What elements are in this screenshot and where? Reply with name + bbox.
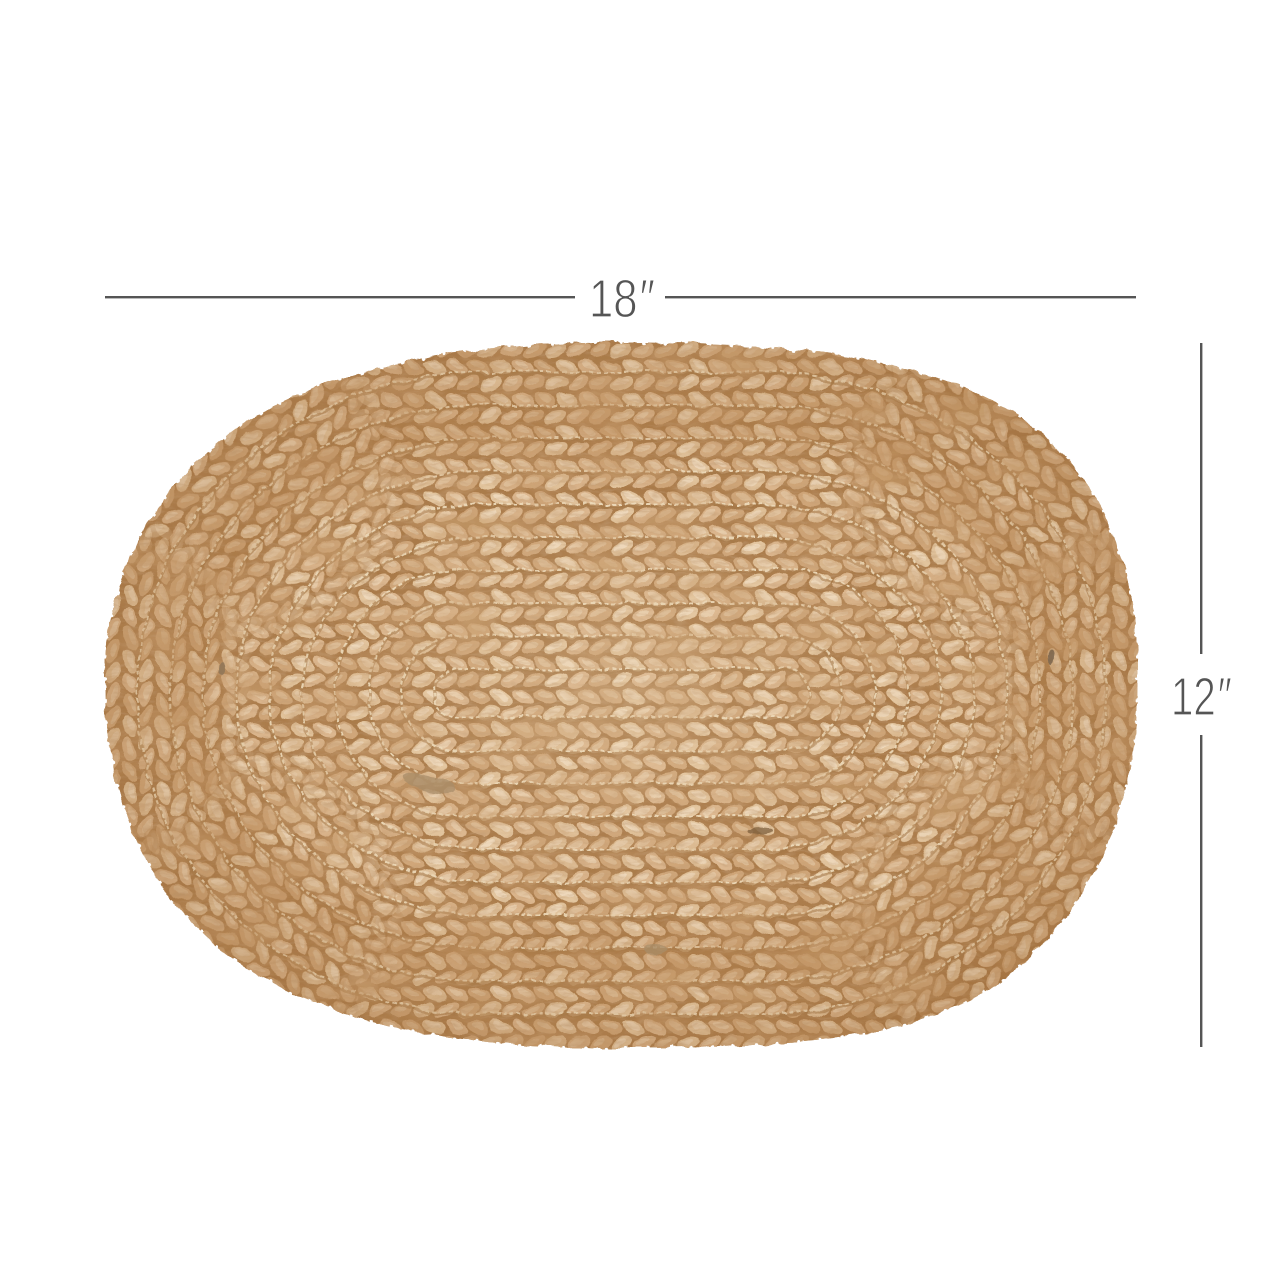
infographic: placemat with dimensions: [104, 280, 1230, 1050]
worn fibre patches: [219, 651, 1053, 955]
braid lobes: diagonal corners, top right and bottom left: [128, 365, 1118, 1018]
tonal mottling: [100, 335, 1145, 1055]
stitch thread lines between rings: [137, 372, 1106, 1014]
overall edge shading: [100, 335, 1145, 1055]
dimension: height 12 inches: 12″: [1171, 667, 1231, 727]
braid lobes: diagonal corners, top left and bottom right: [136, 375, 1118, 1026]
braid lobes: long straight runs: [100, 335, 1145, 1055]
darker ring band: [190, 425, 1050, 955]
braided jute placemat: [100, 335, 1145, 1055]
stitch shadow lines between rings: [137, 374, 1106, 1016]
dimension: width 18 inches: 18″: [589, 269, 655, 329]
fibre grain: [100, 335, 1145, 1055]
scalloped braid edge: [105, 342, 1138, 1048]
braid lobes: curved ends: [104, 521, 1139, 859]
